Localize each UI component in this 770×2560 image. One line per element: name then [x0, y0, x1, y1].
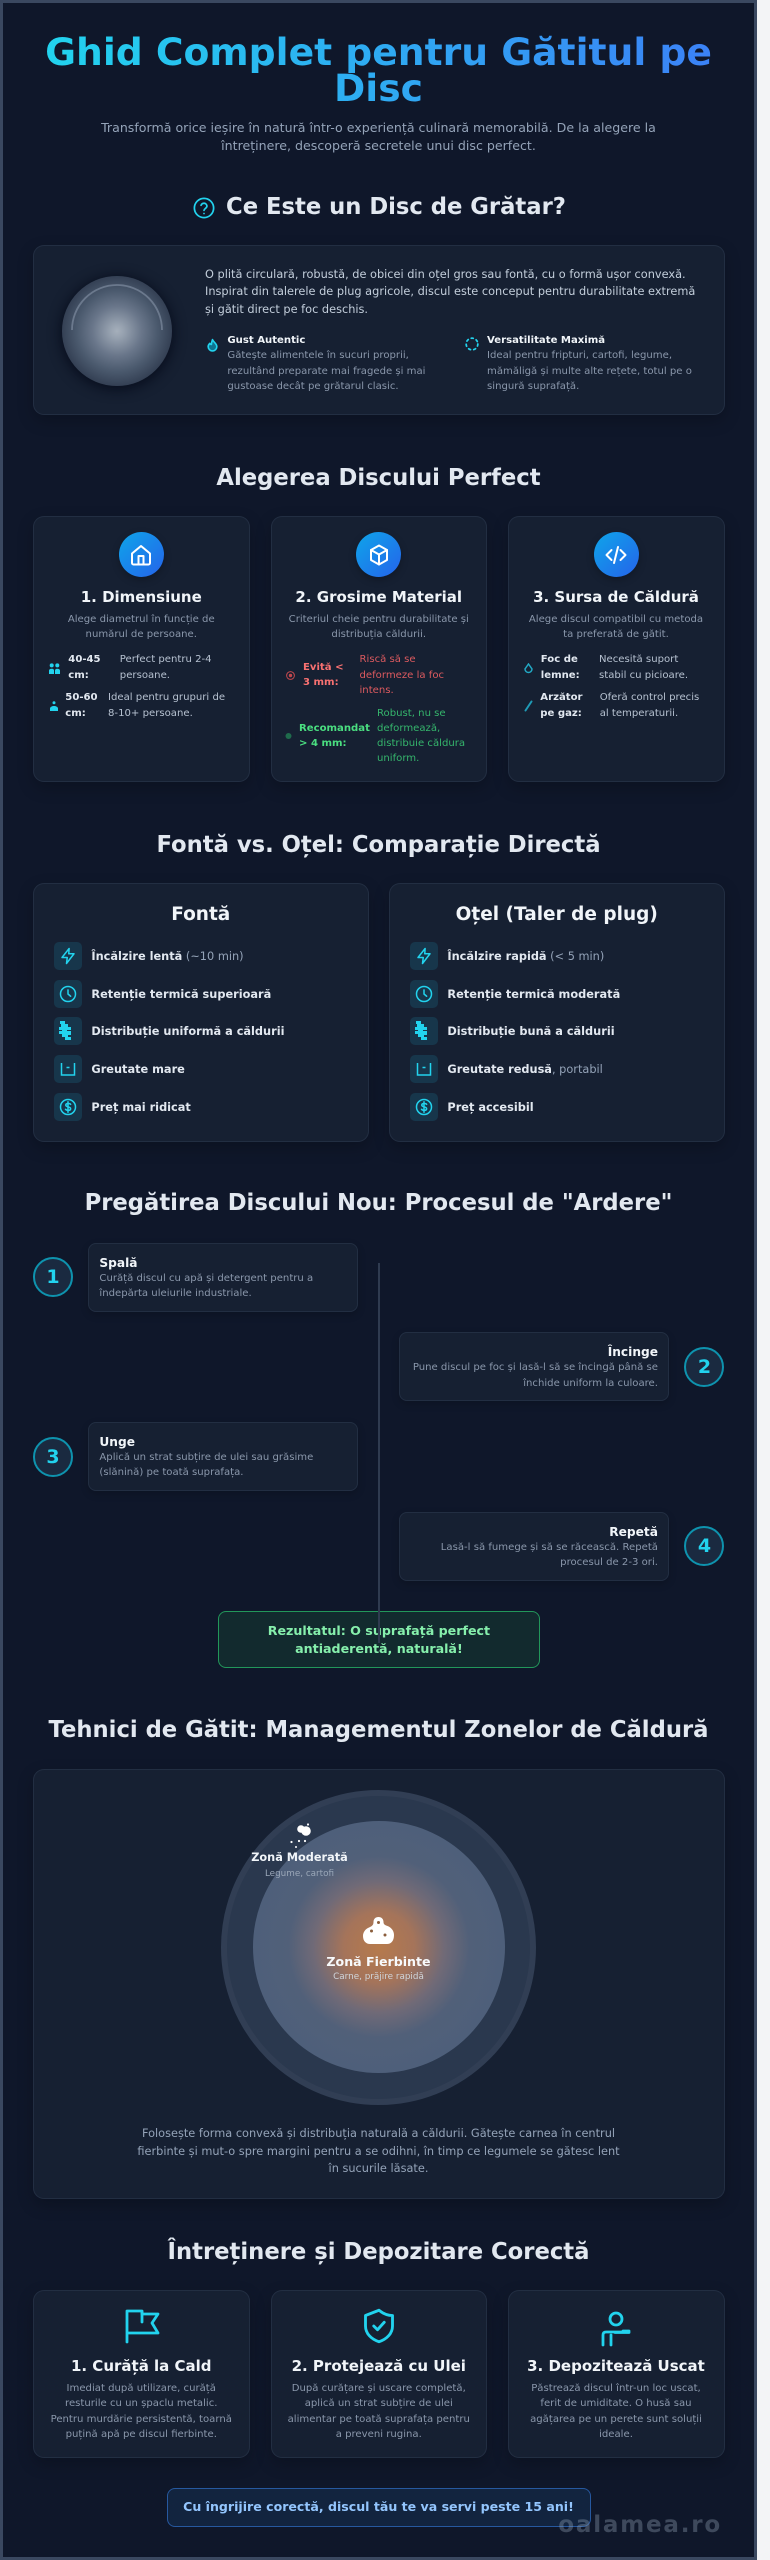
row label: cm: — [68, 670, 89, 681]
feature text: gustoase decât pe grătarul clasic. — [227, 381, 399, 392]
feature text: rezultând preparate mai fragede și mai — [227, 366, 426, 377]
step number: 2 — [698, 1356, 711, 1378]
zone label: moderate: Zonă Moderată — [251, 1851, 348, 1864]
heading: choosing the disc: Alegerea Discului Perfect — [216, 465, 541, 491]
subtitle: întreținere, descoperă secretele unui disc perfect. — [221, 138, 536, 153]
row label: avoid: Evită < — [303, 662, 344, 673]
card heading: 1. Curăță la Cald — [71, 2357, 212, 2375]
title — [0, 34, 757, 107]
icon: weight — [410, 1055, 438, 1083]
feature text: Ideal pentru fripturi, cartofi, legume, — [487, 350, 672, 361]
card heading: 2. Protejează cu Ulei — [292, 2357, 466, 2375]
icon: code — [594, 532, 638, 577]
row text: avoid: deformeze la foc — [360, 670, 444, 681]
icon: meat — [363, 1917, 394, 1944]
icon: weight — [54, 1055, 82, 1083]
card text: alimentar pe toată suprafața pentru — [288, 2414, 470, 2424]
card text: După curățare și uscare completă, — [292, 2383, 466, 2394]
panel text: fierbinte și mut-o spre margini pentru a se odihni, în timp ce legumele se gătesc lent — [137, 2144, 620, 2158]
card heading: 3. Sursa de Căldură — [533, 588, 699, 606]
card text: puțină apă pe discul fierbinte. — [66, 2429, 217, 2440]
subtitle: Transformă orice ieșire în natură într-o experiență culinară memorabilă. De la alegere la — [101, 120, 656, 135]
icon: gas burner — [524, 700, 532, 712]
card text — [68, 614, 215, 640]
card text: Alege diametrul în funcție de — [68, 614, 215, 625]
heading: what is a disc: Ce Este un Disc de Grătar? — [226, 194, 566, 220]
row label: Foc de — [541, 654, 578, 665]
row text: recommended — [377, 708, 465, 764]
row label: pe gaz: — [540, 708, 582, 719]
step text: Aplică un strat subțire de ulei sau grăsime — [99, 1452, 313, 1463]
card text — [289, 614, 469, 640]
card text: agățarea pe un perete sunt soluții — [530, 2414, 702, 2424]
step 2: heat — [399, 1332, 724, 1402]
row label: 50-60 — [65, 692, 98, 703]
step text — [413, 1360, 658, 1391]
step card — [399, 1332, 669, 1401]
panel text — [33, 2125, 724, 2178]
step text — [99, 1450, 313, 1480]
description text: și gătit direct pe foc deschis. — [205, 302, 368, 316]
icon: clock — [54, 980, 82, 1008]
icon: distribution — [54, 1017, 82, 1045]
callout: longevity — [166, 2488, 590, 2527]
heading: comparison: Fontă vs. Oțel: Comparație Directă — [156, 832, 601, 858]
heading: maintenance: Întreținere și Depozitare Corectă — [168, 2239, 589, 2265]
zone: inner hot disc — [252, 1821, 504, 2073]
callout: result: antiaderentă, naturală! — [295, 1641, 463, 1656]
row label: recommended: Recomandat — [299, 723, 370, 734]
panel text: Folosește forma convexă și distribuția naturală a căldurii. Gătește carnea în centrul — [142, 2126, 615, 2140]
row label — [541, 654, 580, 681]
panel heading: Fontă — [171, 904, 230, 925]
card text: ferit de umiditate. O husă sau — [540, 2398, 692, 2409]
feature text — [487, 350, 692, 392]
step text: îndepărta uleiurile industriale. — [99, 1288, 252, 1299]
step text: (slănină) pe toată suprafața. — [99, 1467, 244, 1478]
zone note: hot: Carne, prăjire rapidă — [333, 1972, 424, 1982]
card heading: 2. Grosime Material — [295, 588, 462, 606]
icon: vegetables — [290, 1823, 313, 1848]
card text: aplică un strat subțire de ulei — [305, 2398, 453, 2409]
row text: 8-10+ persoane. — [108, 708, 193, 719]
feature heading: Gust Autentic — [227, 335, 305, 346]
row label: Arzător — [540, 692, 583, 703]
icon: box — [356, 532, 401, 577]
card heading: 1. Dimensiune — [81, 588, 202, 606]
step text: închide uniform la culoare. — [523, 1378, 658, 1388]
feature text: singură suprafață. — [487, 381, 579, 392]
callout: result — [218, 1611, 540, 1668]
card: size — [33, 516, 250, 782]
icon: recommended dot — [286, 733, 292, 739]
step 1: wash — [33, 1243, 358, 1312]
timeline line — [378, 1263, 380, 1643]
card text: Pentru murdărie persistentă, toarnă — [51, 2414, 232, 2424]
heading: cooking techniques: Tehnici de Gătit: Managementul Zonelor de Căldură — [49, 1717, 708, 1743]
card text: Imediat după utilizare, curăță — [67, 2383, 216, 2394]
icon: person — [50, 701, 58, 711]
row: retention: Retenție termică moderată — [447, 987, 620, 1001]
row text — [120, 654, 212, 681]
card: material thickness — [270, 516, 487, 782]
row label: cm: — [65, 708, 86, 719]
icon: flag — [124, 2308, 160, 2344]
card text: a preveni rugina. — [336, 2429, 422, 2440]
row text: Necesită suport — [599, 654, 678, 665]
row text: recommended: deformează, — [377, 723, 440, 734]
row label: 40-45 — [68, 654, 101, 665]
row text: persoane. — [120, 670, 170, 681]
card text — [508, 2381, 724, 2442]
step number — [684, 1526, 724, 1566]
icon: shield — [360, 2308, 396, 2344]
card text: Criteriul cheie pentru durabilitate și — [289, 614, 469, 625]
icon: dotted circle — [465, 337, 479, 350]
row text: recommended: Robust, nu se — [377, 708, 446, 719]
card text: ta preferată de gătit. — [563, 629, 669, 640]
card: protect with oil — [270, 2290, 487, 2458]
heading: seasoning process: Pregătirea Discului Nou: Procesul de "Ardere" — [85, 1190, 672, 1216]
step number — [684, 1347, 724, 1387]
callout: longevity: Cu îngrijire corectă, discul tău te va servi peste 15 ani! — [183, 2499, 574, 2514]
panel: cast iron — [33, 883, 368, 1142]
step title: Încinge — [608, 1345, 658, 1359]
row label — [68, 654, 101, 681]
step card — [88, 1422, 358, 1491]
row text: Oferă control precis — [600, 692, 699, 703]
diagram: heat zones — [221, 1790, 536, 2105]
row: retention: Retenție termică superioară — [91, 987, 271, 1001]
row label: avoid — [303, 662, 344, 688]
card text — [270, 2381, 487, 2442]
icon: dollar — [410, 1093, 438, 1121]
card heading: 3. Depozitează Uscat — [527, 2357, 705, 2375]
row label: lemne: — [541, 670, 580, 681]
card text: distribuția căldurii. — [331, 629, 426, 640]
row label: recommended: > 4 mm: — [299, 738, 347, 749]
step 4: repeat — [399, 1512, 724, 1581]
row: weight: Greutate redusă, portabil — [447, 1062, 603, 1076]
card text: Alege discul compatibil cu metoda — [529, 614, 703, 625]
icon: house — [119, 532, 164, 577]
step text: Pune discul pe foc și lasă-l să se încingă până se — [413, 1362, 658, 1373]
row label — [65, 692, 98, 719]
step title: Repetă — [609, 1525, 658, 1539]
row: heating: Încălzire rapidă (< 5 min) — [447, 949, 604, 963]
icon: dollar — [54, 1093, 82, 1121]
step text: procesul de 2-3 ori. — [560, 1557, 658, 1568]
icon: flame — [207, 338, 218, 352]
row text: Ideal pentru grupuri de — [108, 692, 225, 703]
step title: Unge — [99, 1435, 135, 1449]
card text: numărul de persoane. — [86, 629, 197, 640]
icon: group — [49, 663, 60, 674]
title: Disc — [334, 66, 423, 110]
zone label: hot: Zonă Fierbinte — [326, 1954, 431, 1969]
row: heating: Încălzire lentă (~10 min) — [91, 949, 244, 963]
step card — [88, 1243, 358, 1312]
illustration: grill disc — [62, 276, 172, 386]
description text — [205, 266, 695, 316]
row text: recommended: distribuie căldura — [377, 738, 465, 749]
row label — [540, 692, 583, 719]
step number: 4 — [698, 1535, 711, 1557]
icon: person with shelf — [601, 2310, 631, 2346]
icon: bolt — [54, 942, 82, 970]
card text: Păstrează discul într-un loc uscat, — [531, 2383, 701, 2394]
step text: Lasă-l să fumege și să se răcească. Repetă — [441, 1542, 658, 1553]
icon: warning circle — [286, 671, 295, 680]
panel text: în sucurile lăsate. — [329, 2161, 428, 2175]
icon: wood fire — [524, 663, 533, 674]
step card — [399, 1512, 669, 1581]
row label: recommended — [299, 723, 370, 749]
feature: authentic taste — [207, 335, 426, 392]
row: distribution: Distribuție uniformă a căldurii — [91, 1024, 284, 1038]
step number — [33, 1437, 73, 1477]
row text: avoid: Riscă să se — [360, 654, 416, 665]
panel: heat zones — [33, 1769, 724, 2199]
card: store dry — [508, 2290, 724, 2458]
row text — [599, 654, 688, 681]
zone: outer ring — [221, 1790, 536, 2105]
row: price: Preț accesibil — [447, 1100, 534, 1114]
callout: result: Rezultatul: O suprafață perfect — [268, 1623, 490, 1638]
step number: 3 — [46, 1446, 60, 1468]
row text — [108, 692, 225, 719]
card text — [529, 614, 703, 640]
icon: clock — [410, 980, 438, 1008]
row text: stabil cu picioare. — [599, 670, 688, 681]
row: distribution: Distribuție bună a căldurii — [447, 1024, 615, 1038]
row text: al temperaturii. — [600, 708, 678, 719]
row text: Perfect pentru 2-4 — [120, 654, 212, 665]
panel: steel — [389, 883, 724, 1142]
step text: Curăță discul cu apă și detergent pentru a — [99, 1273, 313, 1284]
watermark: oalamea.ro — [558, 2512, 722, 2538]
step text — [441, 1540, 658, 1570]
row text: avoid — [360, 654, 444, 696]
row text — [600, 692, 699, 719]
icon: question circle — [194, 198, 214, 218]
description text: O plită circulară, robustă, de obicei din oțel gros sau fontă, cu o formă ușor convexă. — [205, 266, 686, 280]
icon: distribution — [410, 1017, 438, 1045]
step number — [33, 1257, 73, 1297]
feature: versatility — [465, 335, 692, 392]
card text: resturile cu un șpaclu metalic. — [65, 2398, 217, 2409]
feature text: Gătește alimentele în sucuri proprii, — [227, 350, 409, 361]
step 3: grease — [33, 1422, 358, 1491]
card text: ideale. — [599, 2429, 633, 2440]
description text: Inspirat din talerele de plug agricole, discul este conceput pentru durabilitate extremă — [205, 284, 695, 298]
card: clean while hot — [33, 2290, 250, 2458]
row label: avoid: 3 mm: — [303, 677, 339, 688]
step text — [99, 1271, 313, 1301]
title: Ghid Complet pentru Gătitul pe — [45, 30, 712, 74]
step number: 1 — [46, 1266, 60, 1288]
row: price: Preț mai ridicat — [91, 1100, 191, 1114]
subtitle — [101, 120, 656, 153]
row text: avoid: intens. — [360, 685, 394, 696]
card: heat source — [508, 516, 724, 782]
icon: bolt — [410, 942, 438, 970]
card text — [33, 2381, 250, 2442]
zone note: moderate: Legume, cartofi — [265, 1869, 334, 1879]
panel heading: Oțel (Taler de plug) — [456, 904, 658, 925]
step title: Spală — [99, 1256, 138, 1270]
row: weight: Greutate mare — [91, 1062, 185, 1076]
feature text: mămăligă și multe alte rețete, totul pe o — [487, 366, 692, 377]
row text: recommended: uniform. — [377, 753, 419, 764]
panel: about the disc — [33, 245, 724, 415]
feature heading: Versatilitate Maximă — [487, 335, 605, 346]
feature text — [227, 350, 426, 392]
